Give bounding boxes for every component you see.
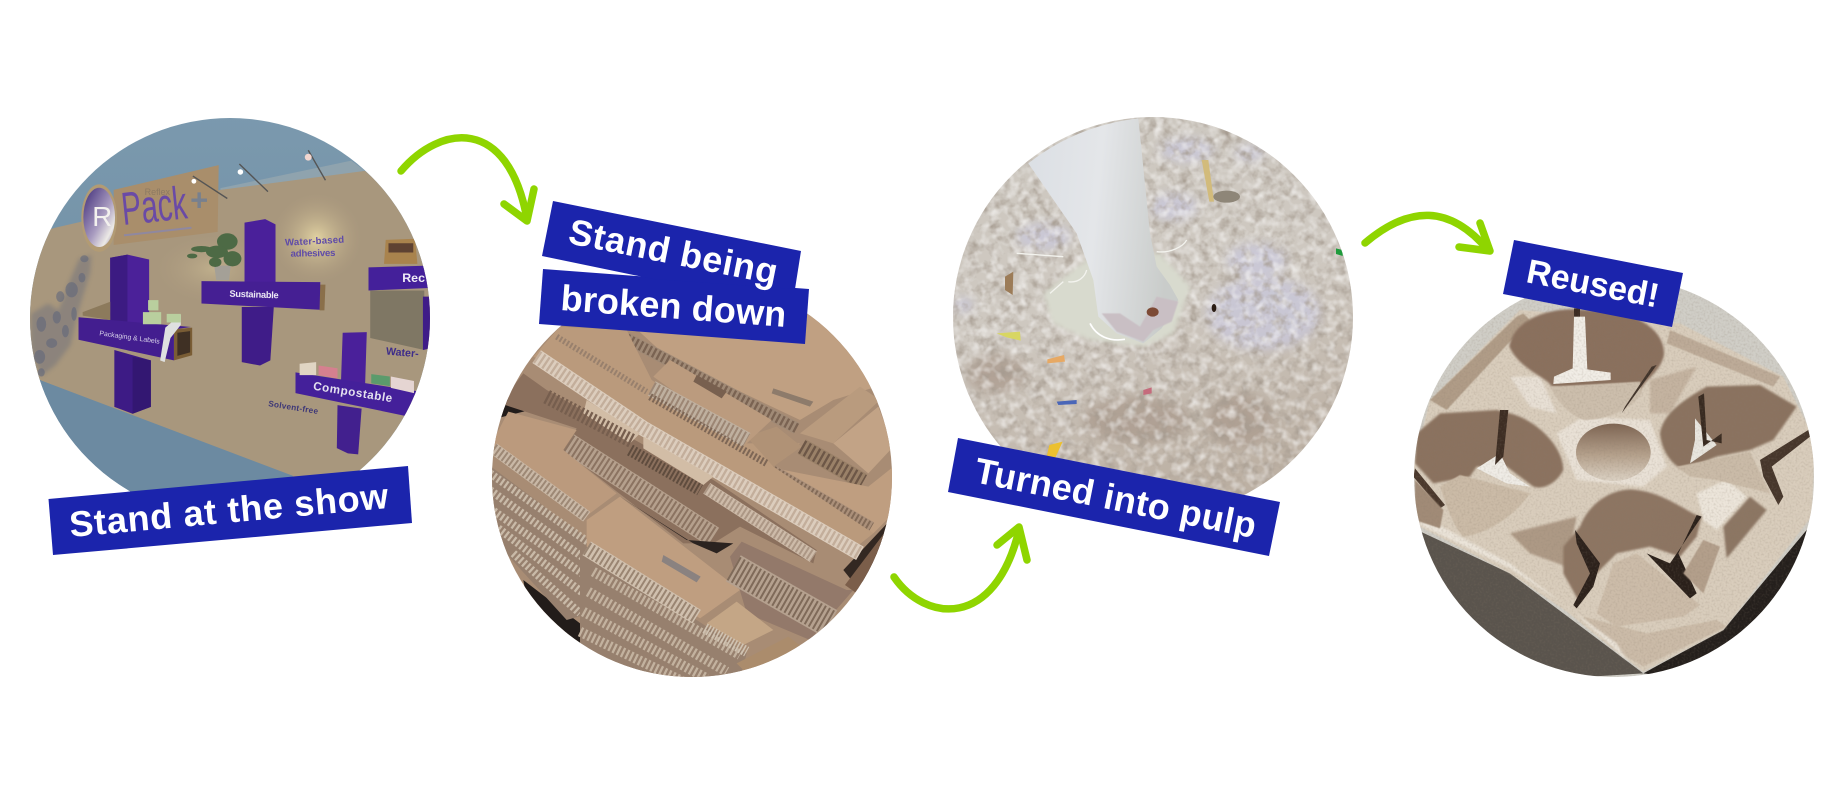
photo: exhibition stand <box>30 118 430 492</box>
tray body <box>1413 310 1815 672</box>
cup well: left <box>1413 410 1563 537</box>
icon: butterfly wall pattern <box>31 255 91 377</box>
purple stand: recyclable: Rec <box>402 271 425 285</box>
panel: turned into pulp <box>948 115 1360 556</box>
wall slogan: water-based adhesives <box>284 236 344 257</box>
purple stand: recyclable: Water- <box>385 346 420 360</box>
lamps <box>191 150 325 198</box>
arrow: step three to four <box>1365 215 1490 251</box>
sign board: Pack <box>119 176 190 235</box>
purple stand: sustainable <box>201 219 325 366</box>
label: broken down: broken down <box>559 277 788 335</box>
arrow: step two to three <box>894 527 1027 609</box>
panel: reused <box>1410 240 1820 683</box>
sign board: Reflex <box>145 187 171 197</box>
sign board <box>81 165 219 252</box>
label: stand being: Stand being <box>565 211 781 292</box>
arrow: step one to two <box>401 138 534 221</box>
wall slogan: water-based adhesives: adhesives <box>291 248 335 260</box>
cardboard stacks <box>487 463 893 682</box>
panel: stand being broken down <box>492 201 892 677</box>
label: stand at the show <box>48 466 412 555</box>
cardboard boards <box>492 307 893 563</box>
plant <box>187 233 241 280</box>
label: reused <box>1503 240 1683 327</box>
purple stand: sustainable: Sustainable <box>229 289 279 300</box>
wall slogan: water-based adhesives: Water-based <box>285 235 345 249</box>
purple stand: compostable: Compostable <box>312 380 394 405</box>
purple stand: packaging and labels <box>79 255 192 414</box>
purple stand: recyclable <box>369 239 431 360</box>
sign board: + <box>190 183 208 218</box>
paper flecks <box>997 160 1343 458</box>
pipe <box>1028 118 1178 343</box>
panel: stand at the show <box>21 111 448 555</box>
purple stand: compostable <box>295 332 418 454</box>
purple stand: packaging and labels: Packaging & Labels <box>99 330 161 346</box>
water pool <box>1017 240 1190 347</box>
label: reused: Reused! <box>1523 253 1662 315</box>
sign board: R <box>92 201 112 232</box>
centre dimple <box>1576 424 1651 481</box>
label: stand at the show: Stand at the show <box>68 475 391 545</box>
photo: paper pulp with pipe <box>950 115 1360 520</box>
wall slogan: solvent-free: Solvent-free <box>268 399 319 416</box>
tray shading <box>1420 367 1767 660</box>
label: broken down <box>539 269 809 344</box>
cup well: right <box>1660 385 1810 505</box>
photo: moulded pulp cup carrier <box>1410 270 1820 683</box>
label: turned into pulp: Turned into pulp <box>971 450 1260 546</box>
cup well: top <box>1509 308 1664 420</box>
photo: stacked honeycomb cardboard <box>492 314 892 677</box>
cup well: bottom <box>1563 489 1720 627</box>
